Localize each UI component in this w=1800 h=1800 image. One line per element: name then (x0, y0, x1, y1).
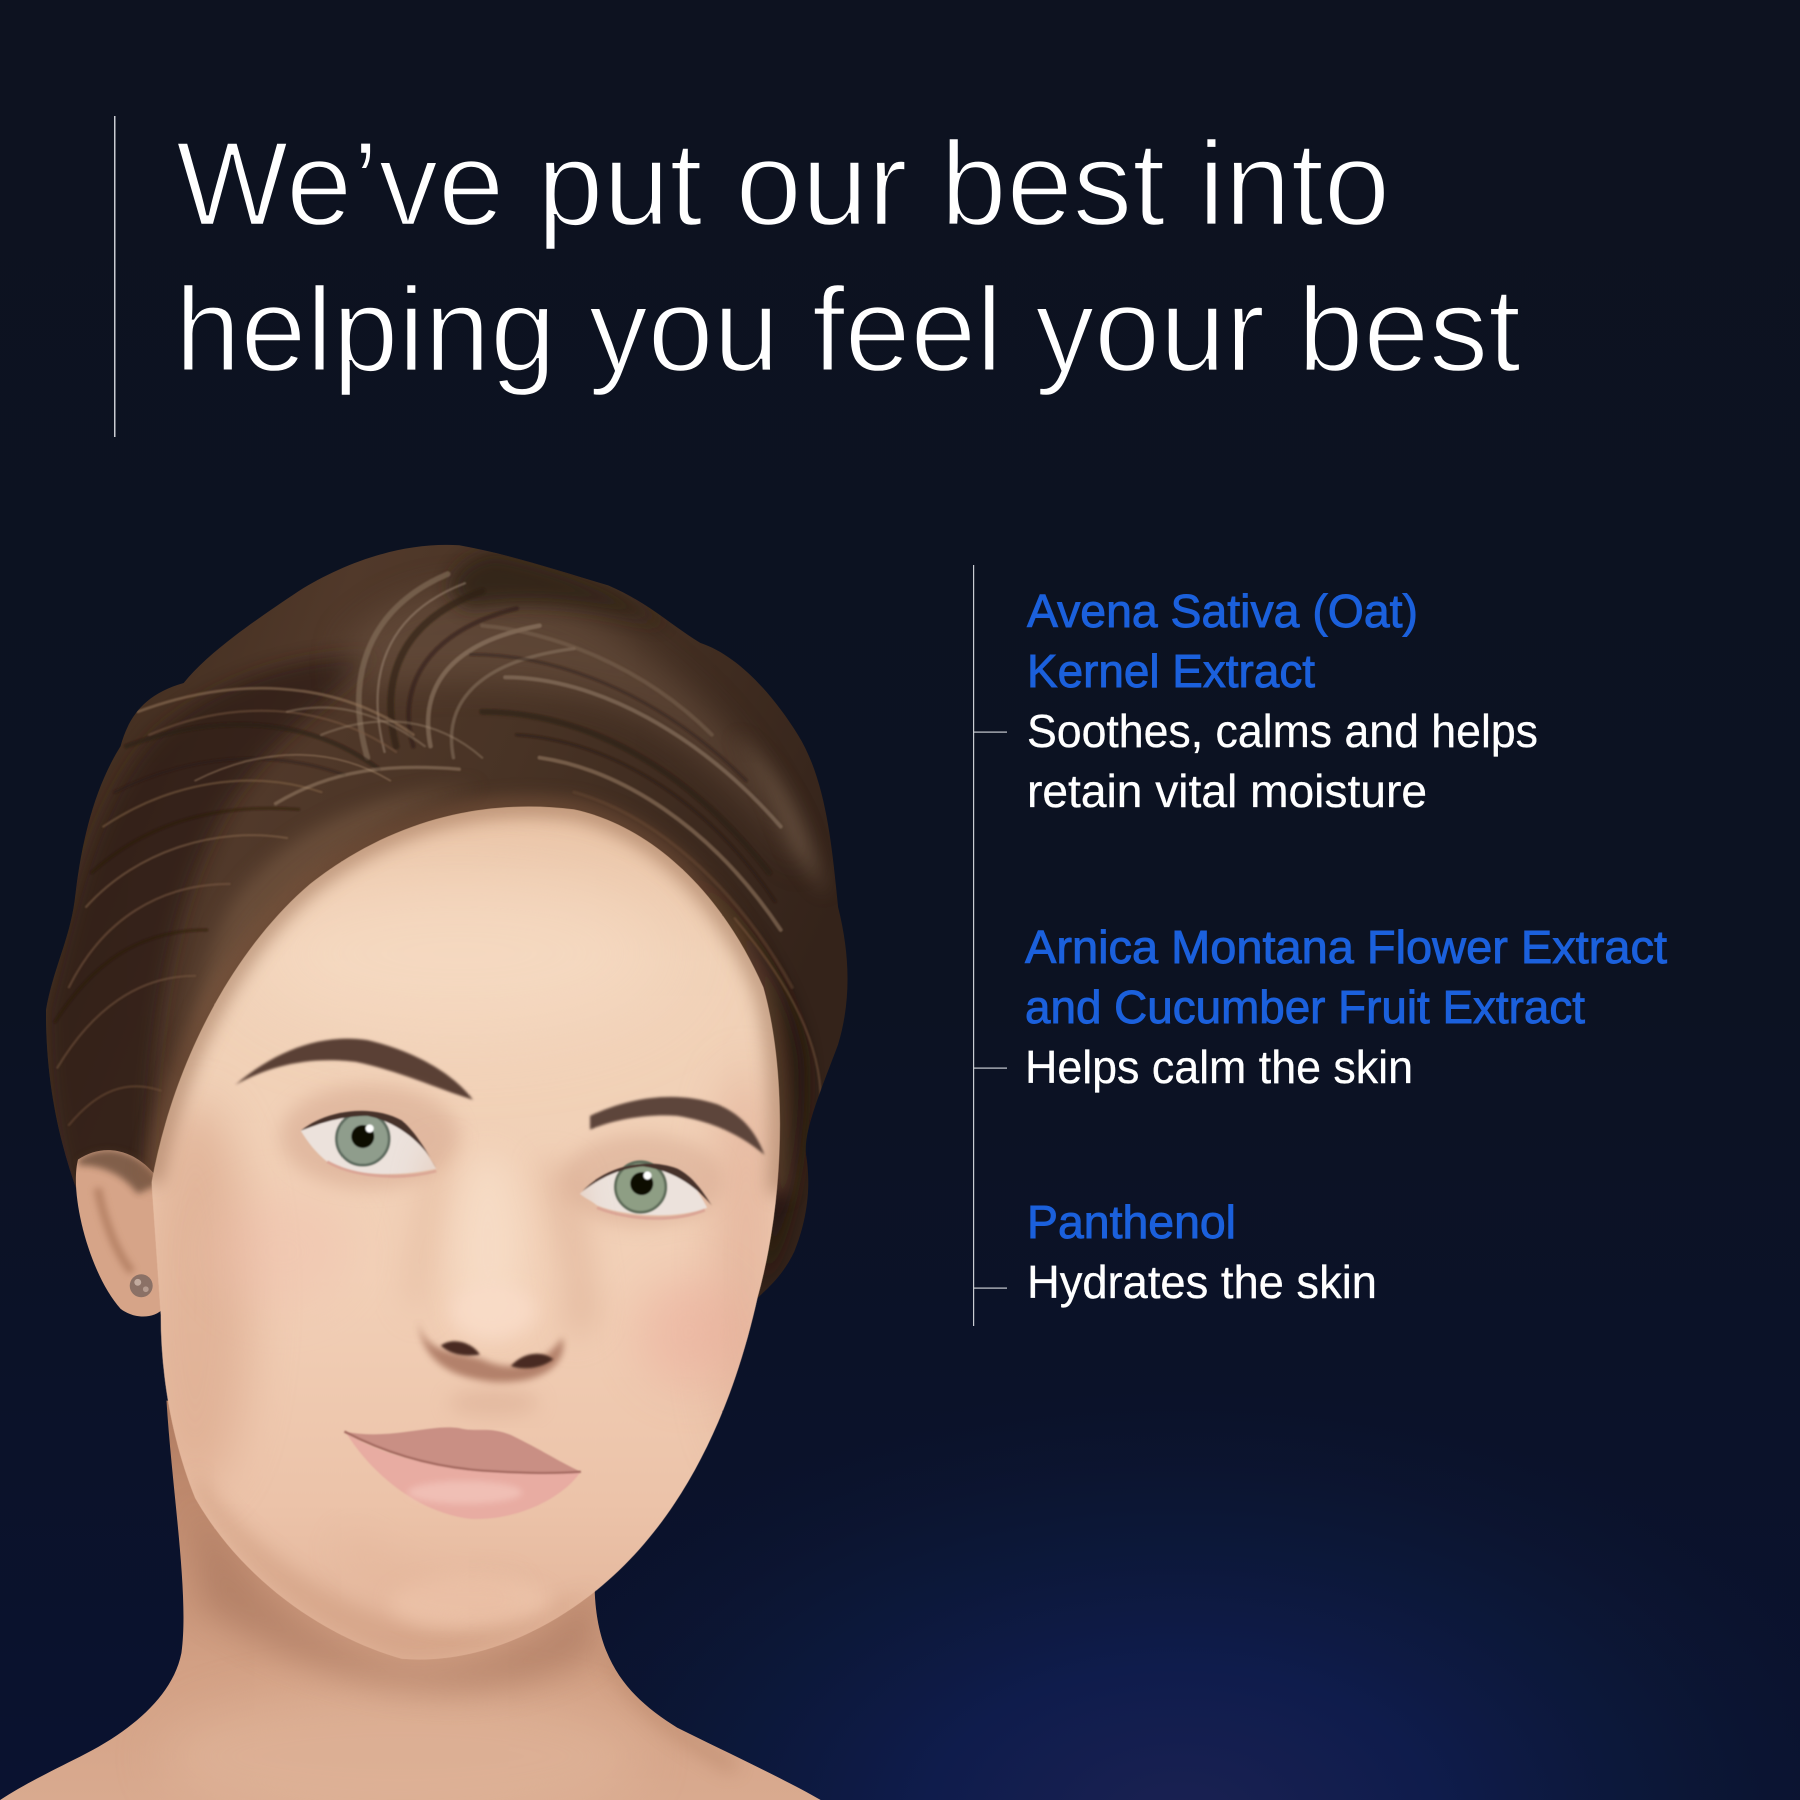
panel: ingredients list (973, 565, 1667, 1326)
ingredient 3: panthenol: Hydrates the skin (1027, 1256, 1377, 1308)
title divider line (114, 116, 116, 437)
hair strands (55, 574, 821, 1125)
nose (402, 1148, 597, 1417)
ingredient 1: oat extract: Kernel Extract (1027, 645, 1315, 697)
left eyebrow (235, 1039, 473, 1100)
ingredient 2: arnica and cucumber extract: Helps calm the skin (1025, 1041, 1413, 1093)
ingredient 1: oat extract (1027, 585, 1538, 817)
ear and earring (76, 1150, 163, 1316)
ingredient list vertical rule with ticks (973, 565, 1007, 1326)
left eye (280, 1085, 459, 1188)
title (175, 117, 1521, 397)
ingredient 1: oat extract: Avena Sativa (Oat) (1027, 585, 1418, 637)
title: We’ve put our best into (176, 117, 1390, 251)
soft hairline edge (152, 806, 780, 1194)
ingredient 3: panthenol (1027, 1196, 1377, 1308)
ingredient 2: arnica and cucumber extract (1025, 921, 1667, 1093)
ingredient 1: oat extract: retain vital moisture (1027, 765, 1427, 817)
lips (344, 1427, 581, 1519)
face skin (152, 806, 780, 1660)
ingredient 3: panthenol: Panthenol (1027, 1196, 1236, 1248)
neck and shoulders (0, 1378, 827, 1800)
right eyebrow (590, 1097, 765, 1155)
portrait photo of woman (0, 534, 861, 1800)
right eye (563, 1134, 723, 1226)
ingredient 2: arnica and cucumber extract: Arnica Montana Flower Extract (1025, 921, 1667, 973)
ingredient 1: oat extract: Soothes, calms and helps (1027, 705, 1538, 757)
ingredient 2: arnica and cucumber extract: and Cucumber Fruit Extract (1025, 981, 1585, 1033)
title: helping you feel your best (175, 263, 1521, 397)
hair mass (34, 534, 861, 1314)
